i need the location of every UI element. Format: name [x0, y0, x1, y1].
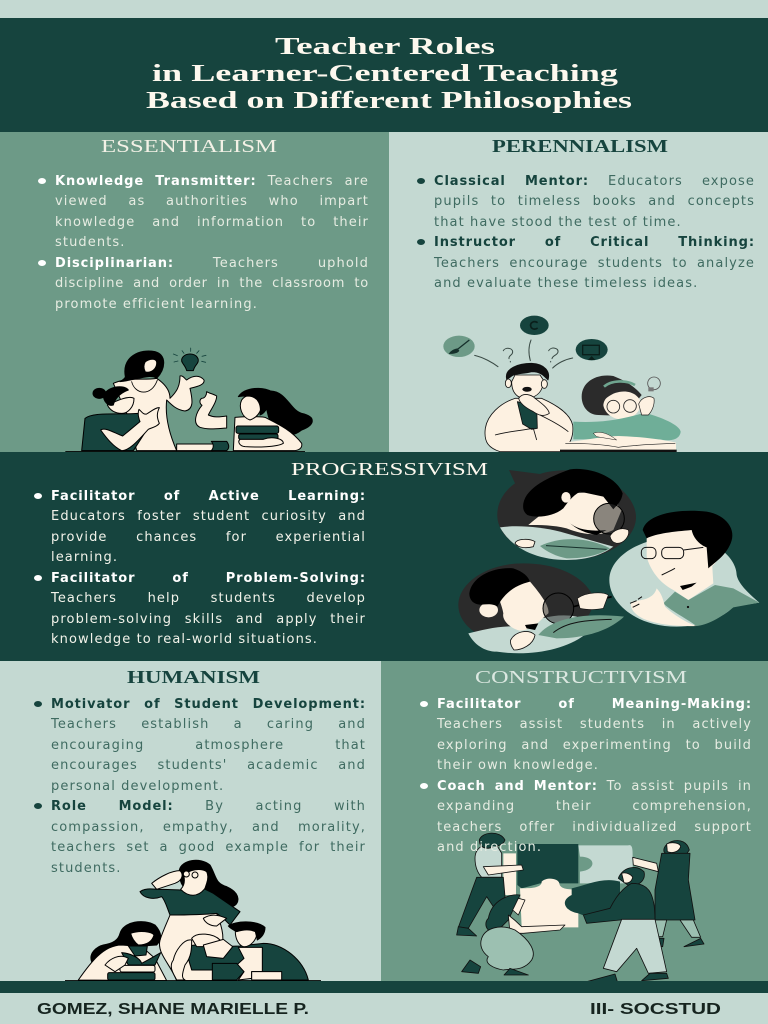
- heading: essentialism: ESSENTIALISM: [101, 136, 277, 156]
- text block: constructivism roles: Teachers assist students in actively: [437, 717, 752, 732]
- right seated woman: [267, 391, 312, 435]
- panel: humanism: [0, 661, 381, 981]
- question marks and thought lines: [475, 340, 573, 368]
- text block: perennialism roles: Instructor of Critical Thinking:: [434, 235, 755, 250]
- text block: constructivism roles: teachers offer individualized support: [437, 820, 752, 835]
- text block: humanism roles: personal development.: [51, 779, 224, 794]
- text block: constructivism roles: and direction.: [437, 840, 542, 855]
- illustration: humanism teacher with students: [65, 860, 321, 981]
- footer: student name: GOMEZ, SHANE MARIELLE P.: [37, 1001, 309, 1018]
- text block: perennialism roles: Classical Mentor: Educators expose: [434, 174, 755, 189]
- panel: perennialism: [389, 132, 768, 452]
- portrait: boy with magnifier and leaf: [458, 563, 624, 653]
- standing teacher: [179, 860, 238, 908]
- bullet: [34, 575, 42, 581]
- heading: humanism: HUMANISM: [127, 667, 260, 687]
- footer: section: III- SOCSTUD: [590, 1001, 721, 1018]
- ground line: [65, 450, 305, 453]
- text block: perennialism roles: that have stood the test of time.: [434, 215, 682, 230]
- text block: progressivism roles: Educators foster student curiosity and: [51, 509, 366, 524]
- text block: essentialism roles: Disciplinarian: Teachers uphold: [55, 256, 369, 271]
- text block: essentialism roles: discipline and order in the classroom to: [55, 276, 369, 291]
- bullet: [420, 783, 428, 789]
- text block: constructivism roles: exploring and experimenting to build: [437, 738, 752, 753]
- text block: perennialism roles: and evaluate these timeless ideas.: [434, 276, 698, 291]
- text block: humanism roles: encouraging atmosphere that: [51, 738, 366, 753]
- title: Teacher Roles: [275, 34, 495, 60]
- portrait: woman with magnifier: [497, 469, 636, 560]
- text block: essentialism roles: knowledge and information to their: [55, 215, 369, 230]
- icon: brush bubble: [443, 336, 475, 357]
- text block: constructivism roles: expanding their comprehension,: [437, 799, 752, 814]
- icon: c bubble: [520, 316, 549, 335]
- panel: lower band: [0, 981, 768, 993]
- text block: essentialism roles: students.: [55, 235, 126, 250]
- text block: essentialism roles: [55, 174, 369, 312]
- text block: constructivism roles: [436, 697, 752, 855]
- person crouching: [462, 895, 565, 975]
- panel: progressivism: [0, 452, 768, 661]
- text block: perennialism roles: Teachers encourage students to analyze: [434, 256, 755, 271]
- text block: constructivism roles: Coach and Mentor: To assist pupils in: [437, 779, 752, 794]
- title: Based on Different Philosophies: [146, 88, 632, 114]
- bullet: [417, 178, 425, 184]
- text block: humanism roles: Teachers establish a caring and: [51, 717, 366, 732]
- text block: progressivism roles: Facilitator of Problem-Solving:: [51, 571, 366, 586]
- bullet: [38, 260, 46, 266]
- text block: humanism roles: compassion, empathy, and morality,: [51, 820, 366, 835]
- text block: perennialism roles: pupils to timeless books and concepts: [434, 194, 755, 209]
- heading: perennialism: PERENNIALISM: [492, 136, 668, 156]
- ground line: [65, 979, 321, 982]
- text block: essentialism roles: promote efficient learning.: [55, 297, 258, 312]
- left seated woman: [82, 413, 147, 451]
- illustration: progressivism three portraits: [458, 468, 760, 654]
- panel: top strip: [0, 0, 768, 18]
- panel: constructivism: [381, 661, 768, 981]
- bullet: [38, 178, 46, 184]
- text block: perennialism roles: [434, 174, 755, 291]
- text block: humanism roles: students.: [51, 860, 122, 876]
- person left standing: [457, 833, 523, 936]
- text block: progressivism roles: Teachers help students develop: [51, 591, 366, 606]
- text block: constructivism roles: their own knowledge.: [437, 758, 599, 773]
- text block: humanism roles: [50, 697, 366, 876]
- text block: progressivism roles: problem-solving skills and apply their: [51, 612, 366, 627]
- text block: progressivism roles: knowledge to real-world situations.: [51, 632, 318, 647]
- puzzle pieces: [503, 844, 633, 927]
- person centre reaching: [583, 867, 668, 982]
- bullet: [417, 239, 425, 245]
- text block: essentialism roles: Knowledge Transmitter: Teachers are: [55, 174, 369, 189]
- text block: progressivism roles: learning.: [51, 550, 118, 565]
- illustration: constructivism team assembling puzzle: [456, 832, 704, 981]
- icon: light bulb: [173, 348, 206, 371]
- text block: progressivism roles: provide chances for experiential: [51, 530, 366, 545]
- illustration: perennialism thinking man and reading girl: [443, 316, 681, 452]
- bullet: [34, 493, 42, 499]
- standing woman: [113, 376, 204, 451]
- text block: humanism roles: Role Model: By acting with: [51, 799, 366, 814]
- reading girl: [563, 376, 681, 450]
- bullet: [420, 701, 428, 707]
- thinking man: [485, 363, 573, 452]
- text block: humanism roles: teachers set a good example for their: [51, 840, 366, 855]
- panel: title banner: [0, 18, 768, 132]
- text block: progressivism roles: [50, 489, 366, 647]
- portrait: man with glasses: [609, 511, 759, 627]
- seated boy with puzzle: [187, 943, 308, 980]
- illustration: essentialism group of three learners: [65, 348, 313, 452]
- seated girl with book: [91, 922, 161, 962]
- books on table: [177, 444, 213, 451]
- bullet: [34, 803, 42, 809]
- person right standing: [633, 840, 704, 947]
- heading: progressivism: PROGRESSIVISM: [291, 459, 488, 479]
- icon: frame bubble: [576, 339, 608, 360]
- title: in Learner-Centered Teaching: [152, 61, 618, 87]
- text block: humanism roles: encourages students' academic and: [51, 758, 366, 773]
- bullet: [34, 701, 42, 707]
- text block: constructivism roles: Facilitator of Meaning-Making:: [437, 697, 752, 712]
- panel: essentialism: [0, 132, 389, 452]
- text block: progressivism roles: Facilitator of Active Learning:: [51, 489, 366, 504]
- heading: constructivism: CONSTRUCTIVISM: [475, 667, 687, 687]
- text block: essentialism roles: viewed as authorities who impart: [55, 194, 369, 209]
- title: [146, 34, 632, 114]
- book base: [560, 450, 677, 452]
- raised hand and arm: [171, 940, 192, 980]
- text block: humanism roles: Motivator of Student Development:: [51, 697, 366, 712]
